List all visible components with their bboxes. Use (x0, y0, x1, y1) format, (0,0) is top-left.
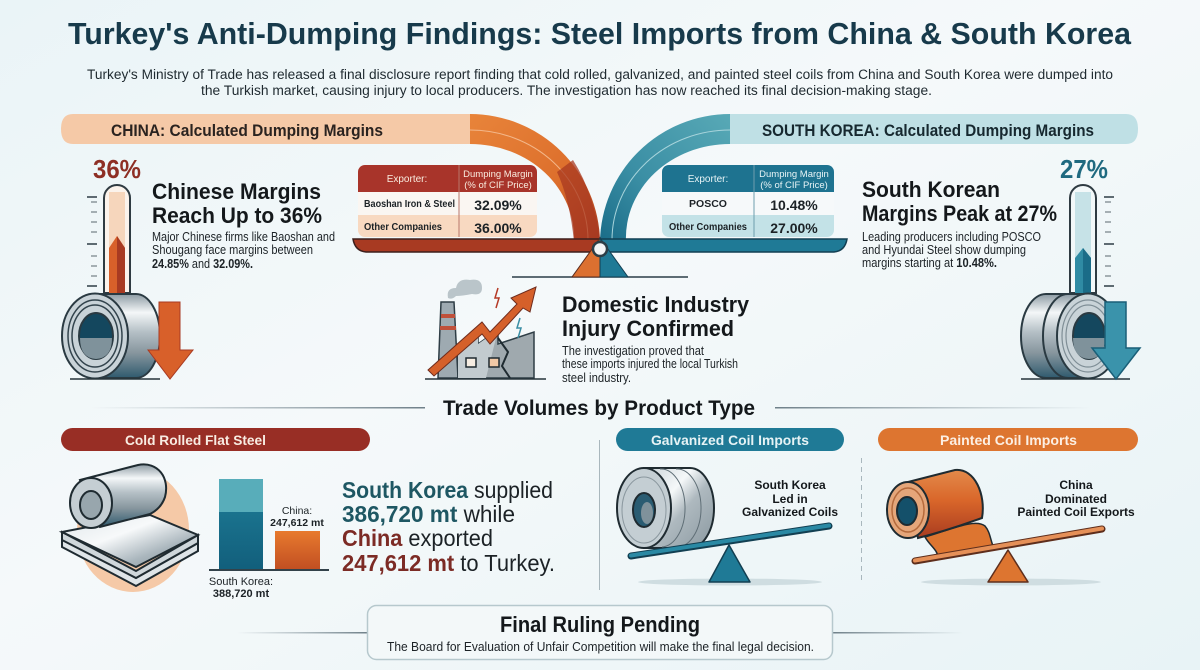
roll face (70, 478, 112, 528)
panel: south korea header: SOUTH KOREA: Calculated Dumping Margins (762, 121, 1094, 140)
fulcrum (988, 550, 1028, 582)
icon: factory with rising arrow (425, 280, 546, 379)
galvanized caption (742, 478, 838, 519)
south korea margin heading: Margins Peak at 27% (862, 201, 1057, 226)
injury heading (562, 292, 749, 341)
south korea margin heading (862, 177, 1057, 226)
ground (425, 378, 546, 380)
table rows: 36.00% (474, 220, 522, 236)
cold rolled summary text: 247,612 mt to Turkey. (342, 550, 555, 576)
plank (915, 529, 1102, 561)
smoke (448, 280, 482, 299)
south korea label: South Korea: (209, 576, 273, 588)
injury body: The investigation proved that (562, 344, 704, 358)
plank (631, 526, 829, 556)
icon: china down arrow (148, 302, 193, 379)
china label: China: (282, 505, 312, 517)
table rows: Other Companies (364, 221, 442, 233)
table rows: 32.09% (474, 197, 522, 213)
china margin heading: Chinese Margins (152, 179, 321, 204)
injury heading: Injury Confirmed (562, 316, 734, 341)
table rows: POSCO (689, 198, 727, 210)
coil face (617, 468, 671, 548)
chimney (438, 302, 458, 378)
galvanized pill (616, 428, 844, 451)
south korea margin body: and Hyundai Steel show dumping (862, 243, 1026, 257)
china label: 247,612 mt (270, 517, 324, 529)
injury heading: Domestic Industry (562, 292, 749, 317)
south korea margin body: Leading producers including POSCO (862, 230, 1041, 244)
south korea bar (219, 479, 263, 569)
building (458, 330, 534, 378)
peach disc (77, 468, 189, 592)
icon: south korea down arrow (1092, 302, 1140, 379)
lightning (495, 288, 499, 308)
axis (209, 569, 329, 571)
south korea margin body: margins starting at 10.48%. (862, 256, 997, 270)
china margin heading: Reach Up to 36% (152, 203, 322, 228)
divider lines (90, 407, 425, 408)
injury body: steel industry. (562, 371, 631, 385)
icon: south korea steel coil (1021, 294, 1130, 379)
painted caption: China (1059, 478, 1093, 492)
bar chart: cold rolled volumes (209, 479, 329, 600)
table header: Exporter: (387, 174, 427, 185)
cold rolled summary text: South Korea supplied (342, 477, 553, 503)
final ruling body: The Board for Evaluation of Unfair Competition will make the final legal decision. (387, 639, 814, 654)
connector lines (237, 632, 367, 634)
korea base bar (600, 239, 847, 252)
injury body (562, 344, 738, 385)
coil end (887, 482, 929, 538)
table header: Dumping Margin (759, 169, 829, 180)
intro text: the Turkish market, causing injury to local producers. The investigation has now reached its final decision-making stage. (201, 83, 932, 98)
icon: galvanized coil on seesaw (617, 468, 829, 586)
table header: Exporter: (688, 174, 728, 185)
ground line (512, 276, 688, 278)
icon: cold rolled coil on sheets (62, 464, 198, 592)
galvanized caption: South Korea (754, 478, 826, 492)
china bar (275, 531, 320, 569)
panel: scale arcs and base (353, 114, 847, 277)
shadow (638, 578, 822, 586)
final ruling heading: Final Ruling Pending (500, 612, 700, 637)
cold rolled pill: Cold Rolled Flat Steel (125, 432, 266, 448)
galvanized pill: Galvanized Coil Imports (651, 432, 809, 448)
table header: (% of CIF Price) (760, 180, 828, 191)
painted pill (878, 428, 1138, 451)
china margin body: 24.85% and 32.09%. (152, 257, 253, 271)
cold rolled summary text: 386,720 mt while (342, 501, 515, 527)
table rows: 27.00% (770, 220, 818, 236)
table header: Dumping Margin (463, 169, 533, 180)
painted caption: Dominated (1045, 492, 1107, 506)
intro text (87, 67, 1113, 98)
table rows (364, 197, 522, 236)
unrolled tongue (925, 523, 993, 558)
column dividers (598, 440, 600, 590)
china label (270, 505, 324, 529)
panel: south korea header (730, 114, 1138, 144)
painted caption (1017, 478, 1135, 519)
icon: painted coil on seesaw (887, 470, 1102, 586)
cold rolled summary text (342, 477, 555, 576)
rising arrow (428, 287, 536, 376)
table rows: Other Companies (669, 221, 747, 233)
table: china margins (358, 165, 537, 237)
south korea label (209, 576, 273, 600)
sheets (62, 539, 198, 586)
china arc (470, 114, 600, 242)
icon: china thermometer (87, 185, 130, 293)
table rows: 10.48% (770, 197, 818, 213)
table: south korea margins (662, 165, 834, 237)
painted pill: Painted Coil Imports (940, 432, 1077, 448)
panel: final ruling (368, 606, 832, 660)
korea arc (600, 114, 730, 242)
cold rolled summary text: China exported (342, 525, 493, 551)
table rows: Baoshan Iron & Steel (364, 198, 455, 210)
table header (688, 169, 829, 191)
south korea 27 percent: 27% (1060, 154, 1108, 184)
icon: south korea thermometer (1070, 185, 1114, 293)
title: Turkey's Anti-Dumping Findings: Steel Imports from China & South Korea (68, 16, 1132, 51)
icon: china steel coil (62, 294, 160, 379)
china margin body: Major Chinese firms like Baoshan and (152, 230, 335, 244)
table rows (669, 197, 818, 236)
cold rolled pill (61, 428, 370, 451)
panel: china header (61, 114, 470, 144)
roll body (80, 464, 166, 527)
table header (387, 169, 533, 191)
galvanized caption: Led in (772, 492, 808, 506)
china margin heading (152, 179, 322, 228)
china margin body (152, 230, 335, 271)
coil body (908, 470, 983, 538)
china margin body: Shougang face margins between (152, 243, 313, 257)
shadow (921, 578, 1101, 586)
injury body: these imports injured the local Turkish (562, 357, 738, 371)
south korea margin heading: South Korean (862, 177, 1000, 202)
painted caption: Painted Coil Exports (1017, 505, 1135, 519)
pivot (572, 238, 600, 277)
panel: china header: CHINA: Calculated Dumping Margins (111, 121, 383, 140)
coil body (644, 468, 714, 548)
intro text: Turkey's Ministry of Trade has released a final disclosure report finding that cold rolled, galvanized, and painted steel coils from China and South Korea were dumped into (87, 67, 1113, 82)
china base bar (353, 239, 600, 252)
south korea label: 388,720 mt (213, 588, 269, 600)
fulcrum (709, 545, 750, 582)
table header: (% of CIF Price) (464, 180, 532, 191)
galvanized caption: Galvanized Coils (742, 505, 838, 519)
section heading: Trade Volumes by Product Type (443, 397, 755, 420)
south korea margin body (862, 230, 1041, 270)
china 36 percent: 36% (93, 154, 141, 184)
